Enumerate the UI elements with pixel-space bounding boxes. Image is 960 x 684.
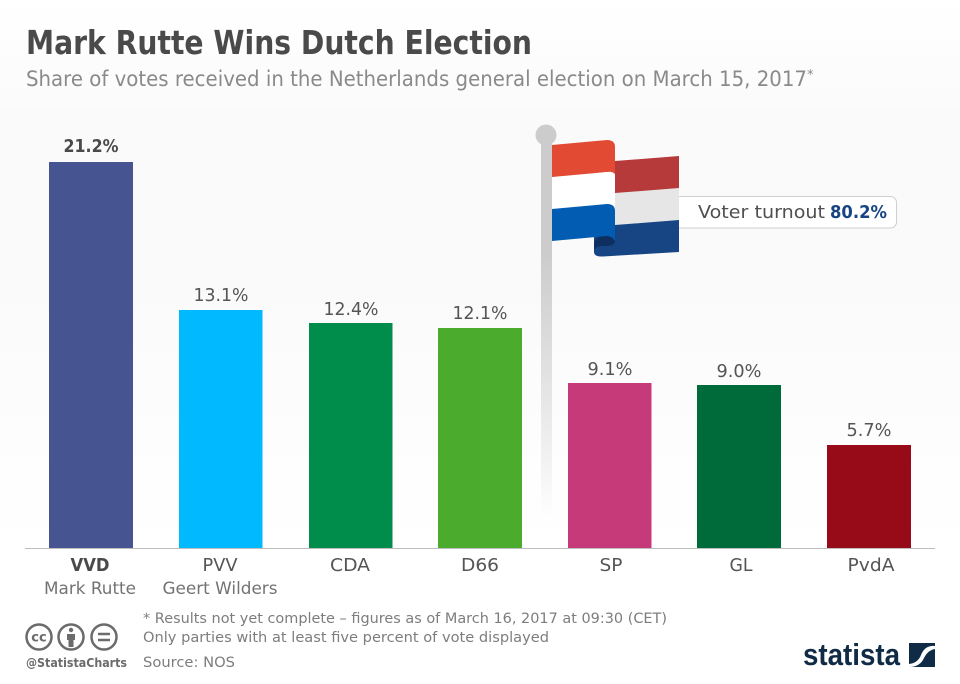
title: Mark Rutte Wins Dutch Election bbox=[26, 23, 532, 62]
bar: PvdA: 5.7% bbox=[846, 421, 892, 441]
icon: creative commons licence bbox=[26, 624, 116, 650]
callout: voter turnout: Voter turnout bbox=[698, 203, 825, 223]
handle: @StatistaCharts bbox=[26, 655, 127, 670]
bar: GL: GL bbox=[730, 556, 753, 576]
bar: D66: D66 bbox=[461, 556, 499, 576]
footnotes: * Results not yet complete – figures as of March 16, 2017 at 09:30 (CET) bbox=[143, 611, 667, 627]
bar chart bbox=[44, 137, 911, 599]
front of flag bbox=[552, 140, 615, 241]
icon: statista mark bbox=[909, 643, 935, 667]
subtitle: Share of votes received in the Netherlands general election on March 15, 2017 bbox=[26, 67, 807, 91]
bar: PVV: Geert Wilders bbox=[162, 579, 278, 599]
bar: CDA: 12.4% bbox=[324, 300, 378, 320]
baseline bbox=[25, 548, 935, 549]
bar: GL: 9.0% bbox=[716, 362, 762, 382]
icon: cc: cc bbox=[31, 630, 47, 646]
bar: SP bbox=[568, 360, 652, 576]
bar: PVV: 13.1% bbox=[194, 286, 248, 306]
bar: D66: 12.1% bbox=[452, 304, 508, 324]
bar: CDA bbox=[309, 300, 392, 576]
icon: attribution bbox=[58, 624, 84, 650]
flag pole bbox=[536, 124, 556, 520]
bar: PVV: PVV bbox=[202, 556, 238, 576]
bar: VVD bbox=[44, 137, 136, 599]
bar: PVV bbox=[162, 286, 278, 599]
bar: D66 bbox=[438, 304, 522, 576]
icon: no derivatives bbox=[92, 624, 116, 650]
bar: SP: 9.1% bbox=[588, 360, 632, 380]
bar: GL bbox=[697, 362, 781, 576]
bar: SP: SP bbox=[600, 556, 622, 576]
footnotes bbox=[143, 611, 667, 671]
subtitle: * bbox=[807, 68, 814, 83]
callout: voter turnout bbox=[667, 196, 896, 228]
bar: PvdA: PvdA bbox=[848, 556, 895, 576]
footnotes: Only parties with at least five percent of vote displayed bbox=[143, 630, 549, 646]
icon: flag with pole bbox=[536, 124, 679, 520]
callout: voter turnout: 80.2% bbox=[830, 203, 887, 223]
back of flag bbox=[594, 156, 679, 257]
bar: VVD: Mark Rutte bbox=[44, 579, 136, 599]
bar: VVD: 21.2% bbox=[64, 137, 118, 157]
bar: PvdA bbox=[827, 421, 911, 576]
bar: CDA: CDA bbox=[330, 556, 370, 576]
statista logo: statista bbox=[803, 637, 901, 672]
source: Source: NOS bbox=[143, 655, 235, 671]
bar: VVD: VVD bbox=[70, 556, 110, 576]
